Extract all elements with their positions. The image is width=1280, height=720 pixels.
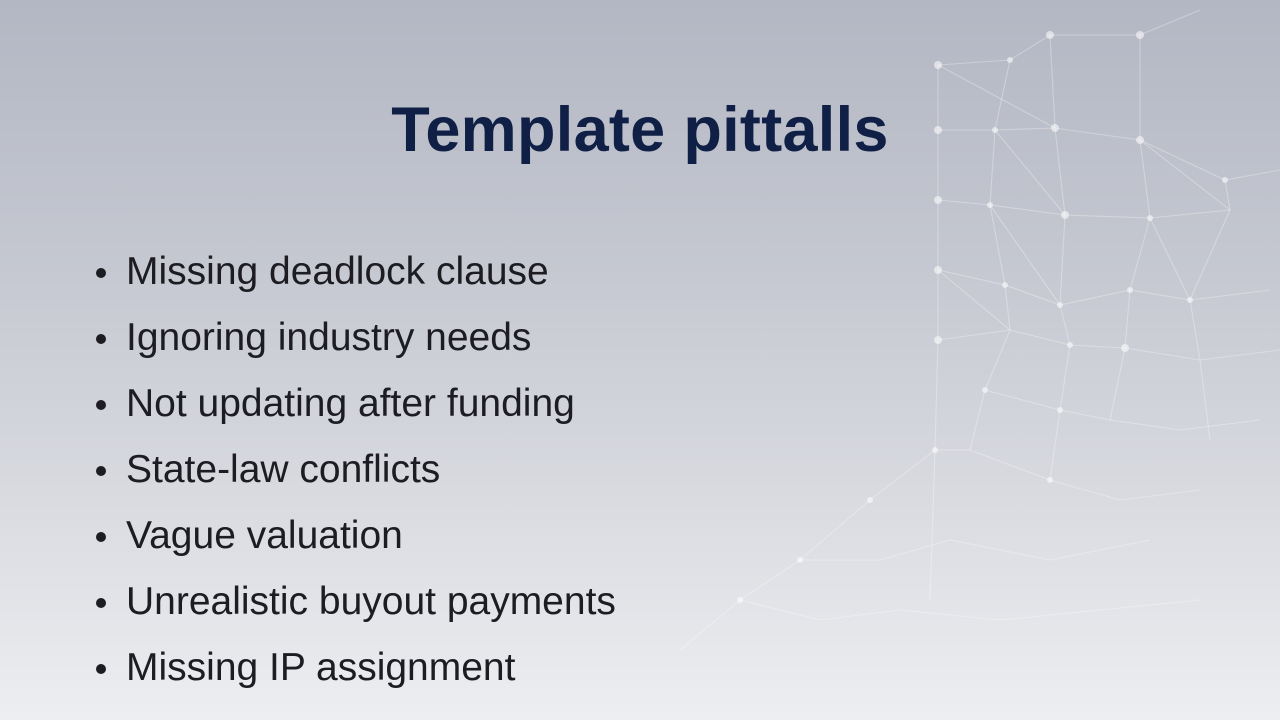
bullet 1: Missing deadlock clause [126,250,549,293]
bullet 2: Ignoring industry needs [126,316,531,359]
bullet 3: Not updating after funding [126,382,575,425]
bullet list [96,250,616,689]
bullet 7: Missing IP assignment [126,646,515,689]
bullet 6: Unrealistic buyout payments [126,580,616,623]
bullet 4: State-law conflicts [126,448,440,491]
bullet 5: Vague valuation [126,514,403,557]
title: Template pittalls [391,95,889,165]
